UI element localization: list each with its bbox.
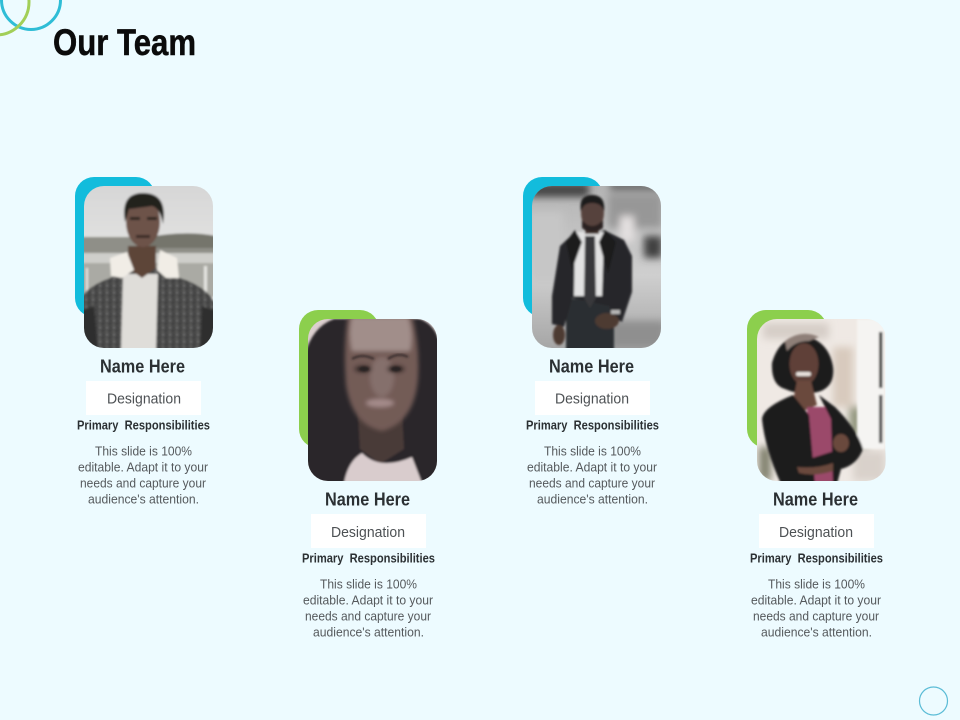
photo: woman with long dark hair [305, 315, 440, 484]
designation box [311, 514, 426, 548]
photo: smiling woman in black blazer [757, 319, 885, 484]
responsibilities text [78, 444, 209, 506]
responsibilities text: This slide is 100% [320, 576, 417, 592]
responsibilities text: audience's attention. [537, 492, 648, 506]
responsibilities text: audience's attention. [88, 492, 199, 506]
responsibilities heading: Primary Responsibilities [302, 550, 435, 566]
designation box: Designation [555, 390, 629, 408]
accent block: blue [75, 177, 155, 317]
name: Name Here [100, 356, 185, 376]
decorative corner circles [0, 0, 60, 35]
responsibilities text [527, 444, 658, 506]
responsibilities text: needs and capture your [305, 608, 432, 624]
responsibilities text: needs and capture your [80, 476, 207, 490]
responsibilities heading: Primary Responsibilities [526, 418, 659, 432]
responsibilities text: needs and capture your [753, 608, 880, 624]
responsibilities text: audience's attention. [313, 624, 424, 640]
designation box [535, 381, 650, 415]
responsibilities text: audience's attention. [761, 624, 872, 640]
designation box [86, 381, 201, 415]
photo: young man in denim jacket [81, 183, 216, 351]
name: Name Here [773, 488, 858, 510]
accent block: green [747, 310, 827, 448]
responsibilities heading: Primary Responsibilities [77, 418, 210, 432]
designation box [759, 514, 874, 548]
panel: team member 1 [75, 177, 216, 506]
responsibilities text: This slide is 100% [768, 576, 865, 592]
photo: man in dark suit walking [529, 183, 665, 351]
responsibilities heading: Primary Responsibilities [750, 550, 883, 566]
page marker circle [920, 687, 948, 715]
name: Name Here [549, 356, 634, 376]
panel: team member 3 [523, 177, 665, 506]
panel: team member 2 [299, 310, 440, 640]
responsibilities text: editable. Adapt it to your [78, 460, 209, 474]
accent block: blue [523, 177, 603, 317]
responsibilities text: This slide is 100% [95, 444, 192, 458]
name: Name Here [325, 488, 410, 510]
responsibilities text: This slide is 100% [544, 444, 641, 458]
responsibilities text: editable. Adapt it to your [751, 592, 882, 608]
responsibilities text: editable. Adapt it to your [303, 592, 434, 608]
designation box: Designation [107, 390, 181, 408]
panel: team member 4 [747, 310, 885, 640]
title: Our Team [53, 22, 196, 63]
designation box: Designation [779, 524, 853, 541]
responsibilities text: needs and capture your [529, 476, 656, 490]
responsibilities text [751, 576, 882, 640]
responsibilities text: editable. Adapt it to your [527, 460, 658, 474]
responsibilities text [303, 576, 434, 640]
designation box: Designation [331, 524, 405, 541]
accent block: green [299, 310, 379, 448]
